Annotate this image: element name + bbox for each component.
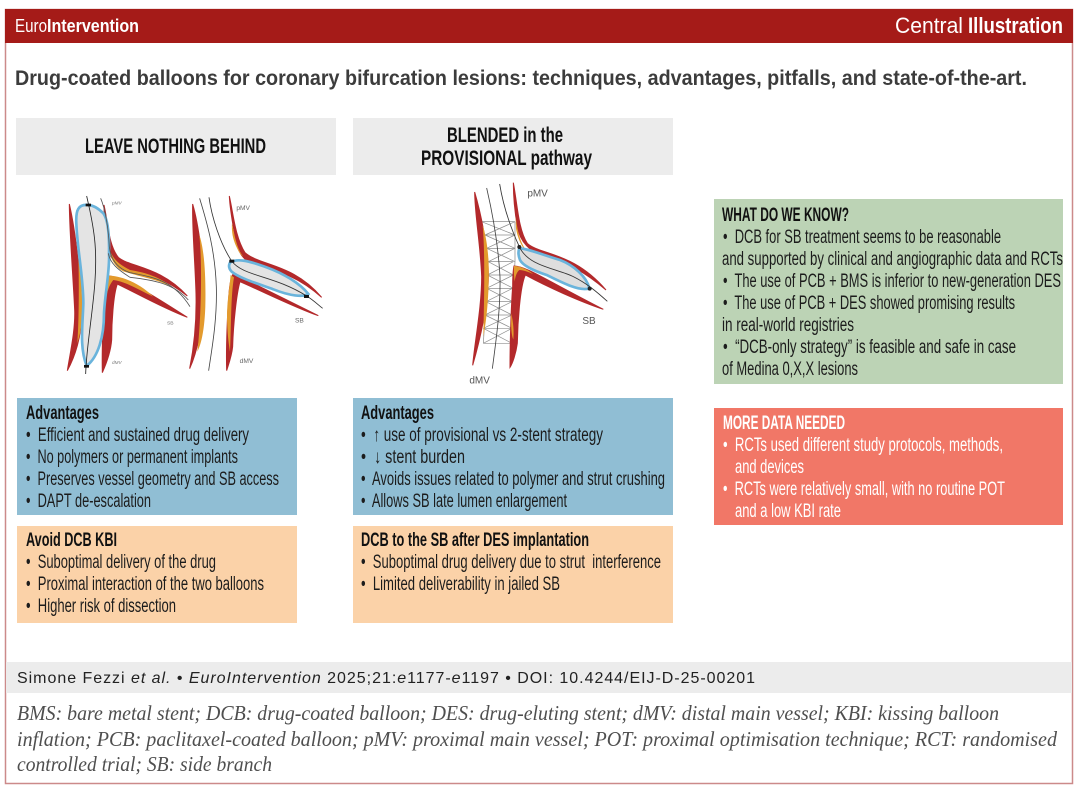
panel heading: blended in the provisional pathway: PROVISIONAL pathway <box>421 147 592 170</box>
panel: what do we know <box>714 199 1063 384</box>
panel heading: blended in the provisional pathway: BLENDED in the <box>447 124 563 147</box>
panel: avoid DCB KBI: • Suboptimal delivery of the drug <box>26 552 216 573</box>
header bar: Euro <box>15 16 47 36</box>
citation bar: Simone Fezzi et al. • EuroIntervention 2025;21:e1177-e1197 • DOI: 10.4244/EIJ-D-25-00201 <box>17 670 755 687</box>
panel: avoid DCB KBI: Avoid DCB KBI <box>26 530 117 551</box>
panel heading: leave nothing behind <box>16 118 336 175</box>
diagram: stent with side-branch balloon: dMV <box>469 375 490 386</box>
panel: more data needed <box>714 408 1063 525</box>
panel heading: leave nothing behind: LEAVE NOTHING BEHIND <box>85 135 266 158</box>
panel: more data needed: MORE DATA NEEDED <box>723 413 845 434</box>
panel: advantages, blended provisional: • Avoids issues related to polymer and strut crushing <box>361 469 665 490</box>
panel: what do we know: in real-world registries <box>722 315 854 336</box>
header bar: Central <box>895 13 963 38</box>
header bar: Intervention <box>47 16 139 36</box>
diagram: balloon in main vessel: dMV <box>112 360 122 365</box>
panel: DCB to the SB after DES implantation: DCB to the SB after DES implantation <box>361 530 589 551</box>
panel: what do we know: of Medina 0,X,X lesions <box>722 359 858 380</box>
panel: advantages, leave nothing behind: Advantages <box>26 403 99 424</box>
panel: DCB to the SB after DES implantation: • Suboptimal drug delivery due to strut interference <box>361 552 661 573</box>
panel: avoid DCB KBI <box>17 526 297 623</box>
diagram: balloon in main vessel: pMV <box>236 205 251 212</box>
panel: advantages, leave nothing behind: • Efficient and sustained drug delivery <box>26 425 249 446</box>
header bar: Illustration <box>968 13 1063 38</box>
diagram: balloon in main vessel <box>67 196 323 374</box>
abbreviations <box>17 701 1057 776</box>
panel: what do we know: WHAT DO WE KNOW? <box>722 205 849 226</box>
panel: advantages, blended provisional: • Allows SB late lumen enlargement <box>361 491 567 512</box>
citation bar <box>6 662 1072 693</box>
panel: advantages, blended provisional: • ↓ stent burden <box>361 447 465 468</box>
panel: more data needed: and devices <box>735 457 804 478</box>
diagram: balloon in main vessel: SB <box>295 317 304 324</box>
panel: advantages, blended provisional: • ↑ use of provisional vs 2-stent strategy <box>361 425 603 446</box>
diagram: stent with side-branch balloon: pMV <box>527 188 548 199</box>
panel: advantages, blended provisional <box>353 398 673 515</box>
panel: advantages, leave nothing behind: • No polymers or permanent implants <box>26 447 238 468</box>
panel: more data needed: and a low KBI rate <box>735 501 841 522</box>
diagram: balloon in main vessel: SB <box>167 320 174 326</box>
panel: advantages, leave nothing behind: • DAPT de-escalation <box>26 491 151 512</box>
panel: avoid DCB KBI: • Higher risk of dissection <box>26 596 176 617</box>
diagram: stent with side-branch balloon: SB <box>582 316 596 327</box>
panel heading: blended in the provisional pathway <box>353 118 673 175</box>
header bar <box>5 9 1073 43</box>
abbreviations: BMS: bare metal stent; DCB: drug-coated balloon; DES: drug-eluting stent; dMV: distal main vessel; KBI: kissing balloon <box>17 701 999 725</box>
panel: avoid DCB KBI: • Proximal interaction of the two balloons <box>26 574 264 595</box>
panel: advantages, blended provisional: Advantages <box>361 403 434 424</box>
title: Drug-coated balloons for coronary bifurcation lesions: techniques, advantages, pitfalls, and state-of-the-art. <box>15 67 1027 90</box>
panel: DCB to the SB after DES implantation <box>353 526 673 623</box>
abbreviations: controlled trial; SB: side branch <box>17 752 272 776</box>
diagram: balloon in main vessel: dMV <box>240 358 254 365</box>
diagram: stent with side-branch balloon <box>469 183 607 386</box>
panel: advantages, leave nothing behind <box>17 398 297 515</box>
diagram: balloon in main vessel: pMV <box>111 201 122 206</box>
panel: advantages, leave nothing behind: • Preserves vessel geometry and SB access <box>26 469 279 490</box>
panel: DCB to the SB after DES implantation: • Limited deliverability in jailed SB <box>361 574 560 595</box>
abbreviations: inflation; PCB: paclitaxel-coated balloon; pMV: proximal main vessel; POT: proximal optimisation technique; RCT: randomised <box>17 727 1057 751</box>
